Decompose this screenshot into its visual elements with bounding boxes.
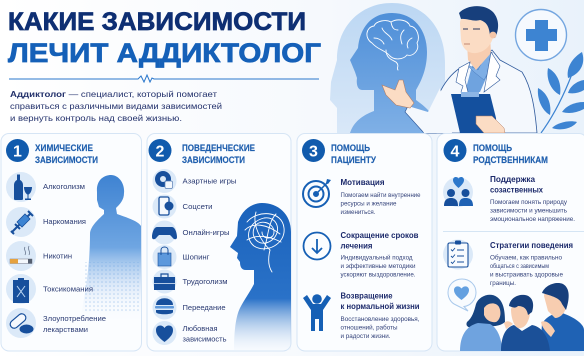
- item: social networks: [152, 194, 212, 218]
- item: behaviour strategies: Обучаем, как правильно: [490, 256, 563, 262]
- centre man body: [501, 325, 550, 351]
- item: love addiction: [152, 321, 227, 345]
- woman face and body: [484, 303, 500, 322]
- item: shorter treatment: и эффективные методики: [340, 264, 416, 270]
- item: alcoholism: [6, 172, 85, 202]
- item: return to normal life: отношений, работы: [340, 324, 398, 332]
- item: motivation: Мотивация: [340, 178, 385, 187]
- hair: [459, 6, 498, 38]
- clipboard: [451, 94, 497, 133]
- icon: plant leaves: [538, 52, 584, 133]
- item: motivation: Помогаем найти внутренние: [340, 192, 421, 199]
- panel 2: behavioural addictions: [147, 134, 291, 351]
- number badge 3: 3: [309, 144, 318, 160]
- panel 1: chemical addictions: [1, 134, 142, 351]
- panel 3: patient help: [297, 134, 432, 351]
- item: gambling: [152, 169, 236, 193]
- hand on clipboard: [476, 116, 505, 133]
- coat: [428, 50, 537, 133]
- intro text: справиться с различными видами зависимостей: [10, 101, 222, 111]
- item: workaholism: Трудоголизм: [182, 277, 228, 286]
- heading: РОДСТВЕННИКАМ: [473, 155, 548, 165]
- intro text: и вернуть контроль над своей жизнью.: [10, 113, 182, 123]
- item: solvent abuse: Токсикомания: [43, 284, 93, 294]
- heading: [35, 143, 98, 165]
- item: online games: Онлайн-игры: [182, 228, 230, 237]
- speech bubble with heart: [448, 279, 476, 311]
- item: medication abuse: Злоупотребление: [43, 314, 106, 323]
- right man head: [544, 289, 567, 318]
- item: behaviour strategies: Стратегии поведения: [490, 241, 573, 250]
- heading: ПОМОЩЬ: [473, 143, 512, 153]
- item: shorter treatment: [304, 231, 418, 278]
- number badge 4: [444, 139, 466, 162]
- silhouette: man: [80, 175, 141, 320]
- item: solvent abuse: [6, 274, 93, 304]
- item: gambling: Азартные игры: [182, 176, 236, 186]
- item: return to normal life: и радости жизни.: [340, 334, 391, 340]
- number badge 2: 2: [156, 144, 165, 160]
- intro text: [10, 89, 222, 123]
- shirt: [465, 52, 494, 92]
- item: love addiction: зависимость: [182, 334, 227, 344]
- item: drug addiction: Наркомания: [43, 217, 86, 226]
- item: nicotine: Никотин: [43, 252, 72, 260]
- heading: ЗАВИСИМОСТИ: [35, 155, 98, 165]
- heading: ХИМИЧЕСКИЕ: [35, 143, 93, 153]
- divider: [443, 230, 584, 232]
- arm: [405, 106, 436, 133]
- item: support of loved ones: эмоциональное напряжение.: [490, 217, 575, 223]
- item: motivation: [303, 178, 421, 216]
- item: overeating: Переедание: [182, 303, 226, 312]
- item: shorter treatment: ускоряют выздоровление.: [340, 272, 416, 278]
- item: medication abuse: [6, 308, 106, 338]
- number badge 1: [6, 139, 29, 162]
- heading: [473, 143, 548, 165]
- item: alcoholism: Алкоголизм: [43, 182, 85, 191]
- icon: brain: [367, 20, 418, 70]
- number badge 2: [148, 139, 172, 162]
- illustration: head silhouette with brain: [330, 3, 445, 133]
- item: behaviour strategies: и выстраивать здоровые: [490, 272, 564, 278]
- item: shorter treatment: Сокращение сроков: [340, 231, 418, 240]
- item: love addiction: Любовная: [182, 324, 218, 333]
- number badge 3: [302, 139, 325, 162]
- item: medication abuse: лекарствами: [43, 325, 88, 334]
- item: social networks: Соцсети: [182, 202, 212, 211]
- heading: ПОВЕДЕНЧЕСКИЕ: [182, 143, 255, 153]
- hands on shoulders: [504, 321, 513, 329]
- item: support of loved ones: зависимости и уменьшить: [490, 208, 567, 214]
- item: return to normal life: [303, 292, 420, 340]
- heading: ПОМОЩЬ: [331, 143, 370, 153]
- intro text: Аддиктолог — специалист, который помогает: [10, 89, 217, 99]
- item: return to normal life: к нормальной жизни: [340, 302, 420, 311]
- number badge 4: 4: [451, 144, 460, 160]
- right man body: [540, 313, 584, 351]
- item: support of loved ones: созаственных: [490, 186, 543, 194]
- item: shopping: Шопинг: [182, 252, 210, 262]
- woman hair: [466, 295, 505, 328]
- item: shorter treatment: Индивидуальный подход: [340, 254, 413, 262]
- illustration: doctor: [382, 6, 537, 133]
- item: motivation: ресурсы и желание: [340, 202, 397, 208]
- item: support of loved ones: [443, 175, 575, 223]
- item: motivation: измениться.: [340, 210, 376, 216]
- heading: ПАЦИЕНТУ: [331, 155, 376, 165]
- item: drug addiction: [6, 207, 86, 237]
- heading: [331, 143, 376, 165]
- item: support of loved ones: Помогаем понять природу: [490, 200, 567, 206]
- hand: [382, 80, 414, 108]
- illustration: family group: [460, 283, 584, 351]
- item: behaviour strategies: [443, 240, 573, 287]
- silhouette: head with tangled thoughts: [230, 203, 291, 350]
- item: overeating: [152, 296, 226, 320]
- panel 4: family help: [437, 134, 584, 351]
- icon: medical cross: [516, 10, 566, 60]
- lapels: [456, 62, 470, 100]
- item: shorter treatment: лечения: [340, 242, 373, 250]
- number badge 1: 1: [13, 144, 22, 160]
- item: nicotine: [6, 241, 72, 271]
- title: КАКИЕ ЗАВИСИМОСТИ: [8, 8, 306, 36]
- item: behaviour strategies: границы.: [490, 281, 516, 287]
- item: return to normal life: Возвращение: [340, 292, 393, 300]
- item: return to normal life: Восстановление здоровья,: [340, 317, 420, 323]
- title: [8, 8, 321, 68]
- item: shopping: [152, 245, 210, 269]
- neck and face: [467, 35, 491, 70]
- heading: [182, 143, 255, 165]
- title: ЛЕЧИТ АДДИКТОЛОГ: [8, 38, 321, 68]
- pulse divider: [9, 75, 319, 82]
- item: workaholism: [152, 270, 228, 294]
- item: behaviour strategies: общаться с зависимым: [490, 264, 549, 270]
- heading: ЗАВИСИМОСТИ: [182, 155, 245, 165]
- item: online games: [152, 220, 230, 244]
- centre man head: [511, 301, 530, 328]
- item: support of loved ones: Поддержка: [490, 175, 535, 184]
